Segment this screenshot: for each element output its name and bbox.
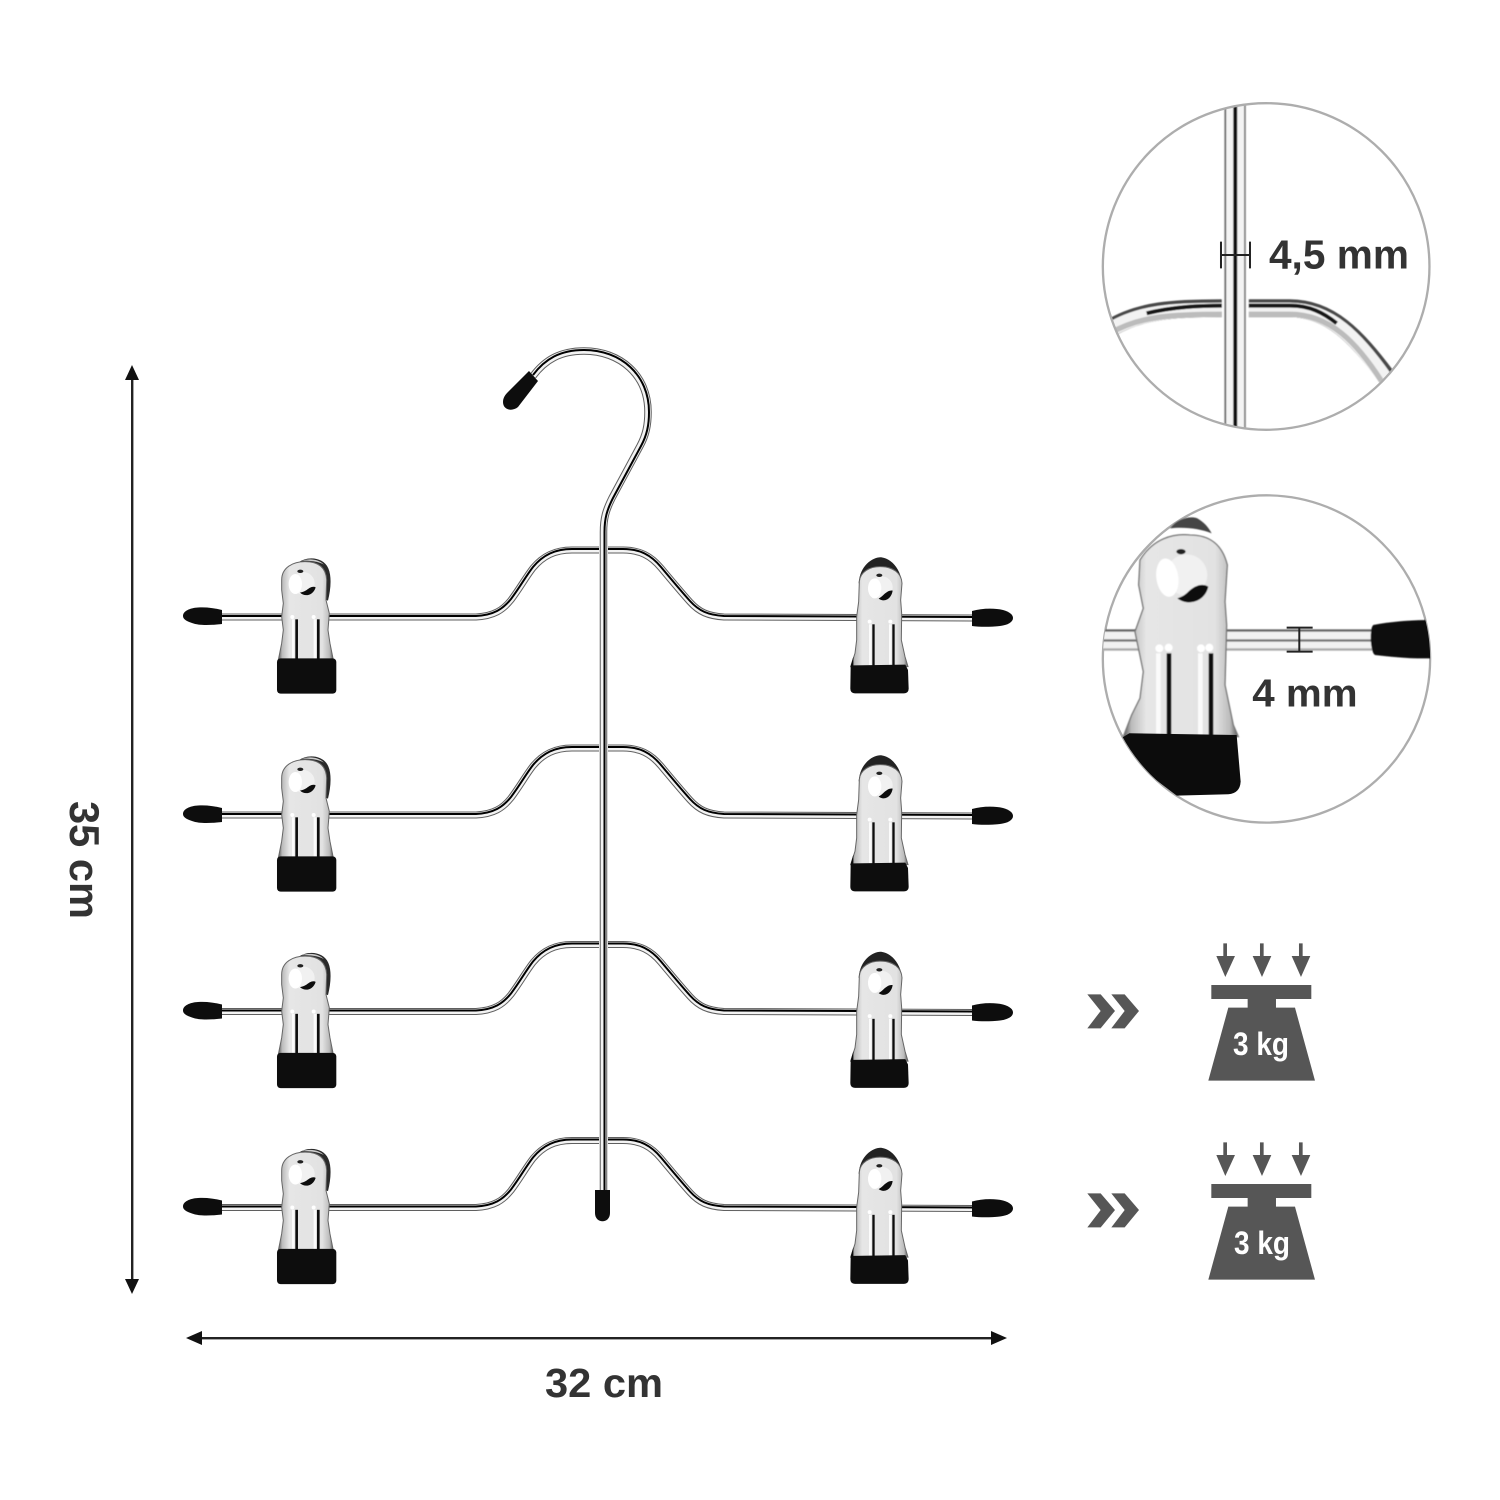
load icon tier 4: [1087, 1142, 1315, 1280]
right clip tier 1: [850, 557, 909, 693]
width label: 32 cm: [545, 1360, 663, 1406]
left clip tier 4: [277, 1149, 336, 1284]
central hook and stem: [503, 350, 649, 1221]
hook rubber tip: [503, 371, 538, 410]
detail circle: hook wire thickness: [1103, 100, 1429, 433]
left clip tier 1: [277, 558, 336, 694]
label 4 mm: 4 mm: [1252, 672, 1358, 716]
hanger tier 2: [183, 747, 1013, 892]
clip body: [1123, 517, 1238, 737]
left clip tier 3: [277, 953, 336, 1088]
wire: [1103, 631, 1373, 649]
label 3 kg: 3 kg: [1234, 1225, 1290, 1261]
rubber tip: [1371, 620, 1433, 658]
hanger tier 4: [183, 1140, 1013, 1284]
hanger tier 1: [183, 549, 1013, 694]
right clip tier 3: [850, 952, 909, 1088]
height dimension arrow: [125, 365, 139, 1294]
label 4,5 mm: 4,5 mm: [1269, 231, 1409, 277]
detail circle: clip wire thickness: [1100, 495, 1433, 823]
height label: 35 cm: [61, 801, 108, 919]
right clip tier 2: [850, 755, 909, 891]
hanger tier 3: [183, 944, 1013, 1088]
measure mark 4,5 mm: [1221, 242, 1250, 268]
label 3 kg: 3 kg: [1233, 1026, 1289, 1062]
stem rubber tip: [595, 1190, 610, 1221]
width dimension arrow: [186, 1331, 1007, 1345]
load icon tier 3: [1087, 943, 1315, 1081]
right clip tier 4: [850, 1148, 909, 1284]
measure mark 4 mm: [1287, 628, 1313, 652]
left clip tier 2: [277, 756, 336, 892]
